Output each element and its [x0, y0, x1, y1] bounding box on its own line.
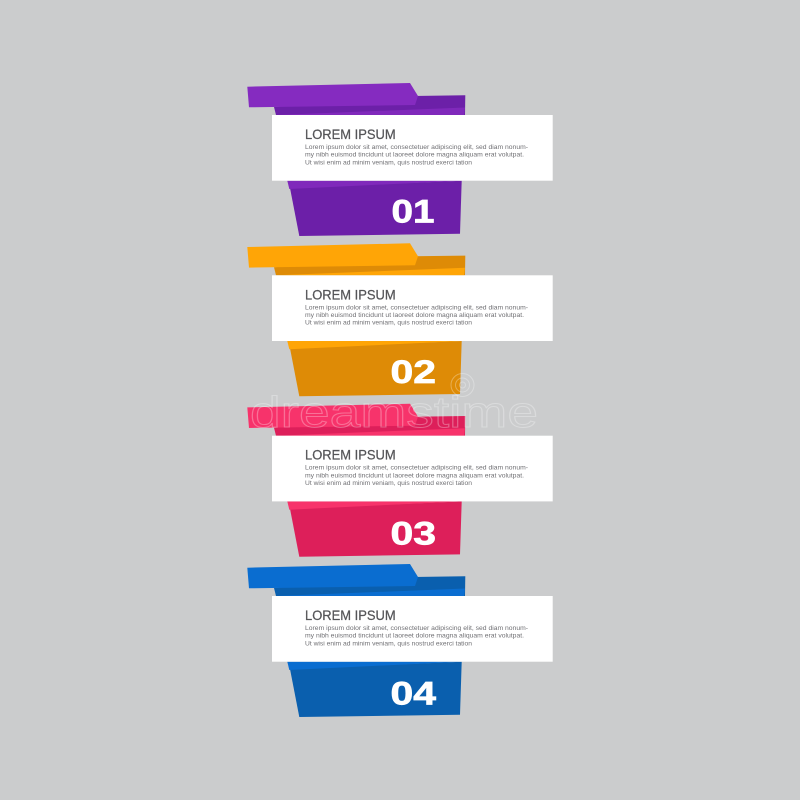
watermark wordmark: dreamstime [250, 388, 538, 437]
white text card [272, 275, 553, 341]
number 04: 04 [390, 676, 436, 712]
body text: Ut wisi enim ad minim veniam, quis nostrud exerci tation [305, 320, 472, 327]
number 03: 03 [390, 516, 436, 552]
white text card [272, 596, 553, 662]
white text card [272, 115, 553, 181]
body text: my nibh euismod tincidunt ut laoreet dolore magna aliquam erat volutpat. [305, 633, 524, 640]
bottom block [290, 662, 462, 717]
heading: LOREM IPSUM [305, 126, 396, 142]
number 02: 02 [390, 354, 436, 390]
body text: Ut wisi enim ad minim veniam, quis nostrud exerci tation [305, 480, 472, 487]
body text: my nibh euismod tincidunt ut laoreet dolore magna aliquam erat volutpat. [305, 472, 524, 479]
panel: step 02 [247, 243, 553, 396]
tab: light strip [276, 588, 465, 596]
watermark [250, 374, 538, 437]
body text: Ut wisi enim ad minim veniam, quis nostrud exerci tation [305, 640, 472, 647]
body text: Lorem ipsum dolor sit amet, consectetuer adipiscing elit, sed diam nonum- [305, 625, 528, 632]
body text: my nibh euismod tincidunt ut laoreet dolore magna aliquam erat volutpat. [305, 152, 524, 159]
bottom block [290, 181, 462, 236]
tab: back fold [274, 95, 465, 115]
heading: LOREM IPSUM [305, 286, 396, 302]
panel: step 01 [247, 83, 553, 236]
white text card [272, 436, 553, 501]
bottom block highlight [287, 501, 462, 510]
tab: light strip [276, 108, 465, 115]
body text: Ut wisi enim ad minim veniam, quis nostrud exerci tation [305, 159, 472, 166]
panel: step 04 [247, 564, 553, 717]
tab: back fold [274, 416, 465, 436]
tab: light strip [276, 268, 465, 275]
heading: LOREM IPSUM [305, 447, 396, 463]
tab: front flap [247, 83, 418, 107]
body text: Lorem ipsum dolor sit amet, consectetuer adipiscing elit, sed diam nonum- [305, 465, 528, 472]
bottom block [290, 501, 462, 557]
tab: back fold [274, 256, 465, 275]
bottom block highlight [287, 662, 462, 670]
watermark logo [451, 374, 474, 396]
body text: my nibh euismod tincidunt ut laoreet dolore magna aliquam erat volutpat. [305, 312, 524, 319]
body text: Lorem ipsum dolor sit amet, consectetuer adipiscing elit, sed diam nonum- [305, 304, 528, 311]
tab: light strip [276, 428, 465, 436]
bottom block highlight [287, 181, 462, 189]
tab: front flap [247, 404, 418, 428]
body text: Lorem ipsum dolor sit amet, consectetuer adipiscing elit, sed diam nonum- [305, 144, 528, 151]
tab: back fold [274, 576, 465, 596]
panel: step 03 [247, 404, 553, 557]
number 01: 01 [392, 194, 434, 230]
bottom block [290, 341, 462, 396]
heading: LOREM IPSUM [305, 607, 396, 623]
tab: front flap [247, 243, 418, 268]
bottom block highlight [287, 341, 462, 349]
tab: front flap [247, 564, 418, 588]
